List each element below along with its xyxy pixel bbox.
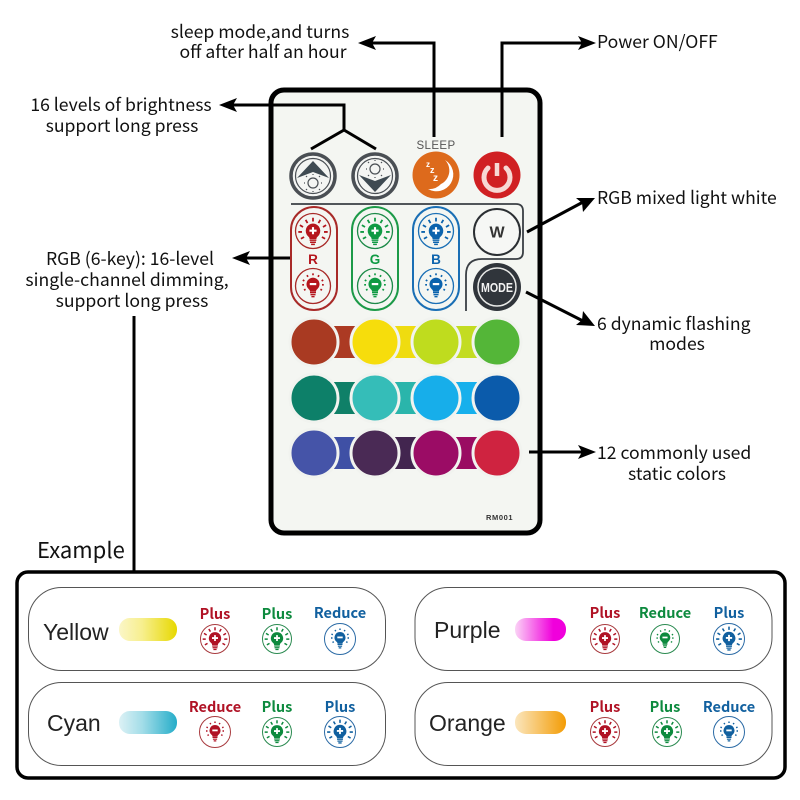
arrow: mode bbox=[526, 292, 595, 326]
heading: example: Example bbox=[37, 533, 125, 565]
label: static colors: static colors bbox=[628, 461, 726, 486]
icon: brightness up button bbox=[291, 154, 335, 198]
label: sleep mode: sleep mode,and turns bbox=[171, 19, 349, 44]
icon: sleep button: z bbox=[430, 165, 435, 175]
row: purple: Reduce bbox=[639, 602, 691, 623]
panel: red keys bbox=[291, 207, 337, 310]
connector: example line bbox=[132, 316, 136, 572]
row: yellow: Plus bbox=[200, 603, 230, 624]
label: RGB dimming: RGB (6-key): 16-level bbox=[46, 246, 214, 271]
label: RGB dimming: support long press bbox=[56, 288, 208, 313]
row: purple: Plus bbox=[590, 602, 620, 623]
label: sleep mode: off after half an hour bbox=[179, 39, 347, 64]
label: mixed white: RGB mixed light white bbox=[597, 185, 777, 210]
row: cyan bbox=[28, 682, 386, 766]
icon: power button bbox=[474, 152, 520, 198]
row: orange: Reduce bbox=[703, 696, 755, 717]
icon: brightness down button bbox=[353, 154, 397, 198]
label: brightness: support long press bbox=[46, 113, 198, 138]
label: power: Power ON/OFF bbox=[597, 29, 718, 54]
arrow: mixed white bbox=[527, 198, 595, 232]
row: purple bbox=[415, 588, 772, 670]
arrow: RGB keys bbox=[232, 251, 290, 265]
arrow: sleep bbox=[358, 36, 434, 137]
label: dynamic modes: 6 dynamic flashing bbox=[597, 311, 751, 336]
panel: green keys: G bbox=[370, 252, 380, 267]
row: orange: Plus bbox=[650, 696, 680, 717]
row: yellow: Yellow bbox=[43, 619, 109, 645]
icon: sleep button bbox=[412, 152, 460, 198]
row: purple: Plus bbox=[714, 602, 744, 623]
panel: blue keys bbox=[413, 207, 459, 310]
panel: remote control bbox=[271, 90, 540, 533]
panel: green keys bbox=[352, 207, 398, 310]
W button bbox=[474, 209, 520, 255]
row: yellow bbox=[28, 588, 386, 670]
row: cyan: Plus bbox=[325, 696, 355, 717]
label: brightness: 16 levels of brightness bbox=[30, 92, 212, 117]
arrow: brightness bbox=[219, 98, 376, 149]
color keys row 1 bbox=[290, 318, 521, 366]
MODE button: MODE bbox=[481, 280, 513, 295]
arrow: static colors bbox=[529, 445, 596, 459]
sleep label: SLEEP bbox=[416, 140, 456, 152]
color keys row 3 bbox=[290, 429, 521, 477]
MODE button bbox=[473, 263, 521, 311]
row: purple: Purple bbox=[434, 617, 500, 643]
label: static colors: 12 commonly used bbox=[597, 440, 751, 465]
row: yellow: Plus bbox=[262, 603, 292, 624]
row: orange bbox=[415, 682, 772, 766]
icon: sleep button: z bbox=[433, 173, 438, 184]
label: dynamic modes: modes bbox=[649, 331, 705, 356]
row: cyan: Reduce bbox=[189, 696, 241, 717]
panel: red keys: R bbox=[308, 252, 318, 267]
row: yellow: Reduce bbox=[314, 602, 366, 623]
row: orange: Plus bbox=[590, 696, 620, 717]
color keys row 2 bbox=[290, 374, 521, 422]
row: cyan: Cyan bbox=[47, 710, 101, 736]
divider line bbox=[291, 204, 523, 311]
row: cyan: Plus bbox=[262, 696, 292, 717]
label: RGB dimming: single-channel dimming, bbox=[25, 267, 229, 292]
model number: RM001 bbox=[486, 513, 513, 522]
panel: blue keys: B bbox=[431, 252, 441, 267]
row: orange: Orange bbox=[429, 710, 506, 736]
panel: example bbox=[17, 572, 785, 778]
W button: W bbox=[489, 224, 505, 242]
arrow: power bbox=[502, 36, 596, 137]
icon: sleep button: z bbox=[426, 160, 430, 169]
